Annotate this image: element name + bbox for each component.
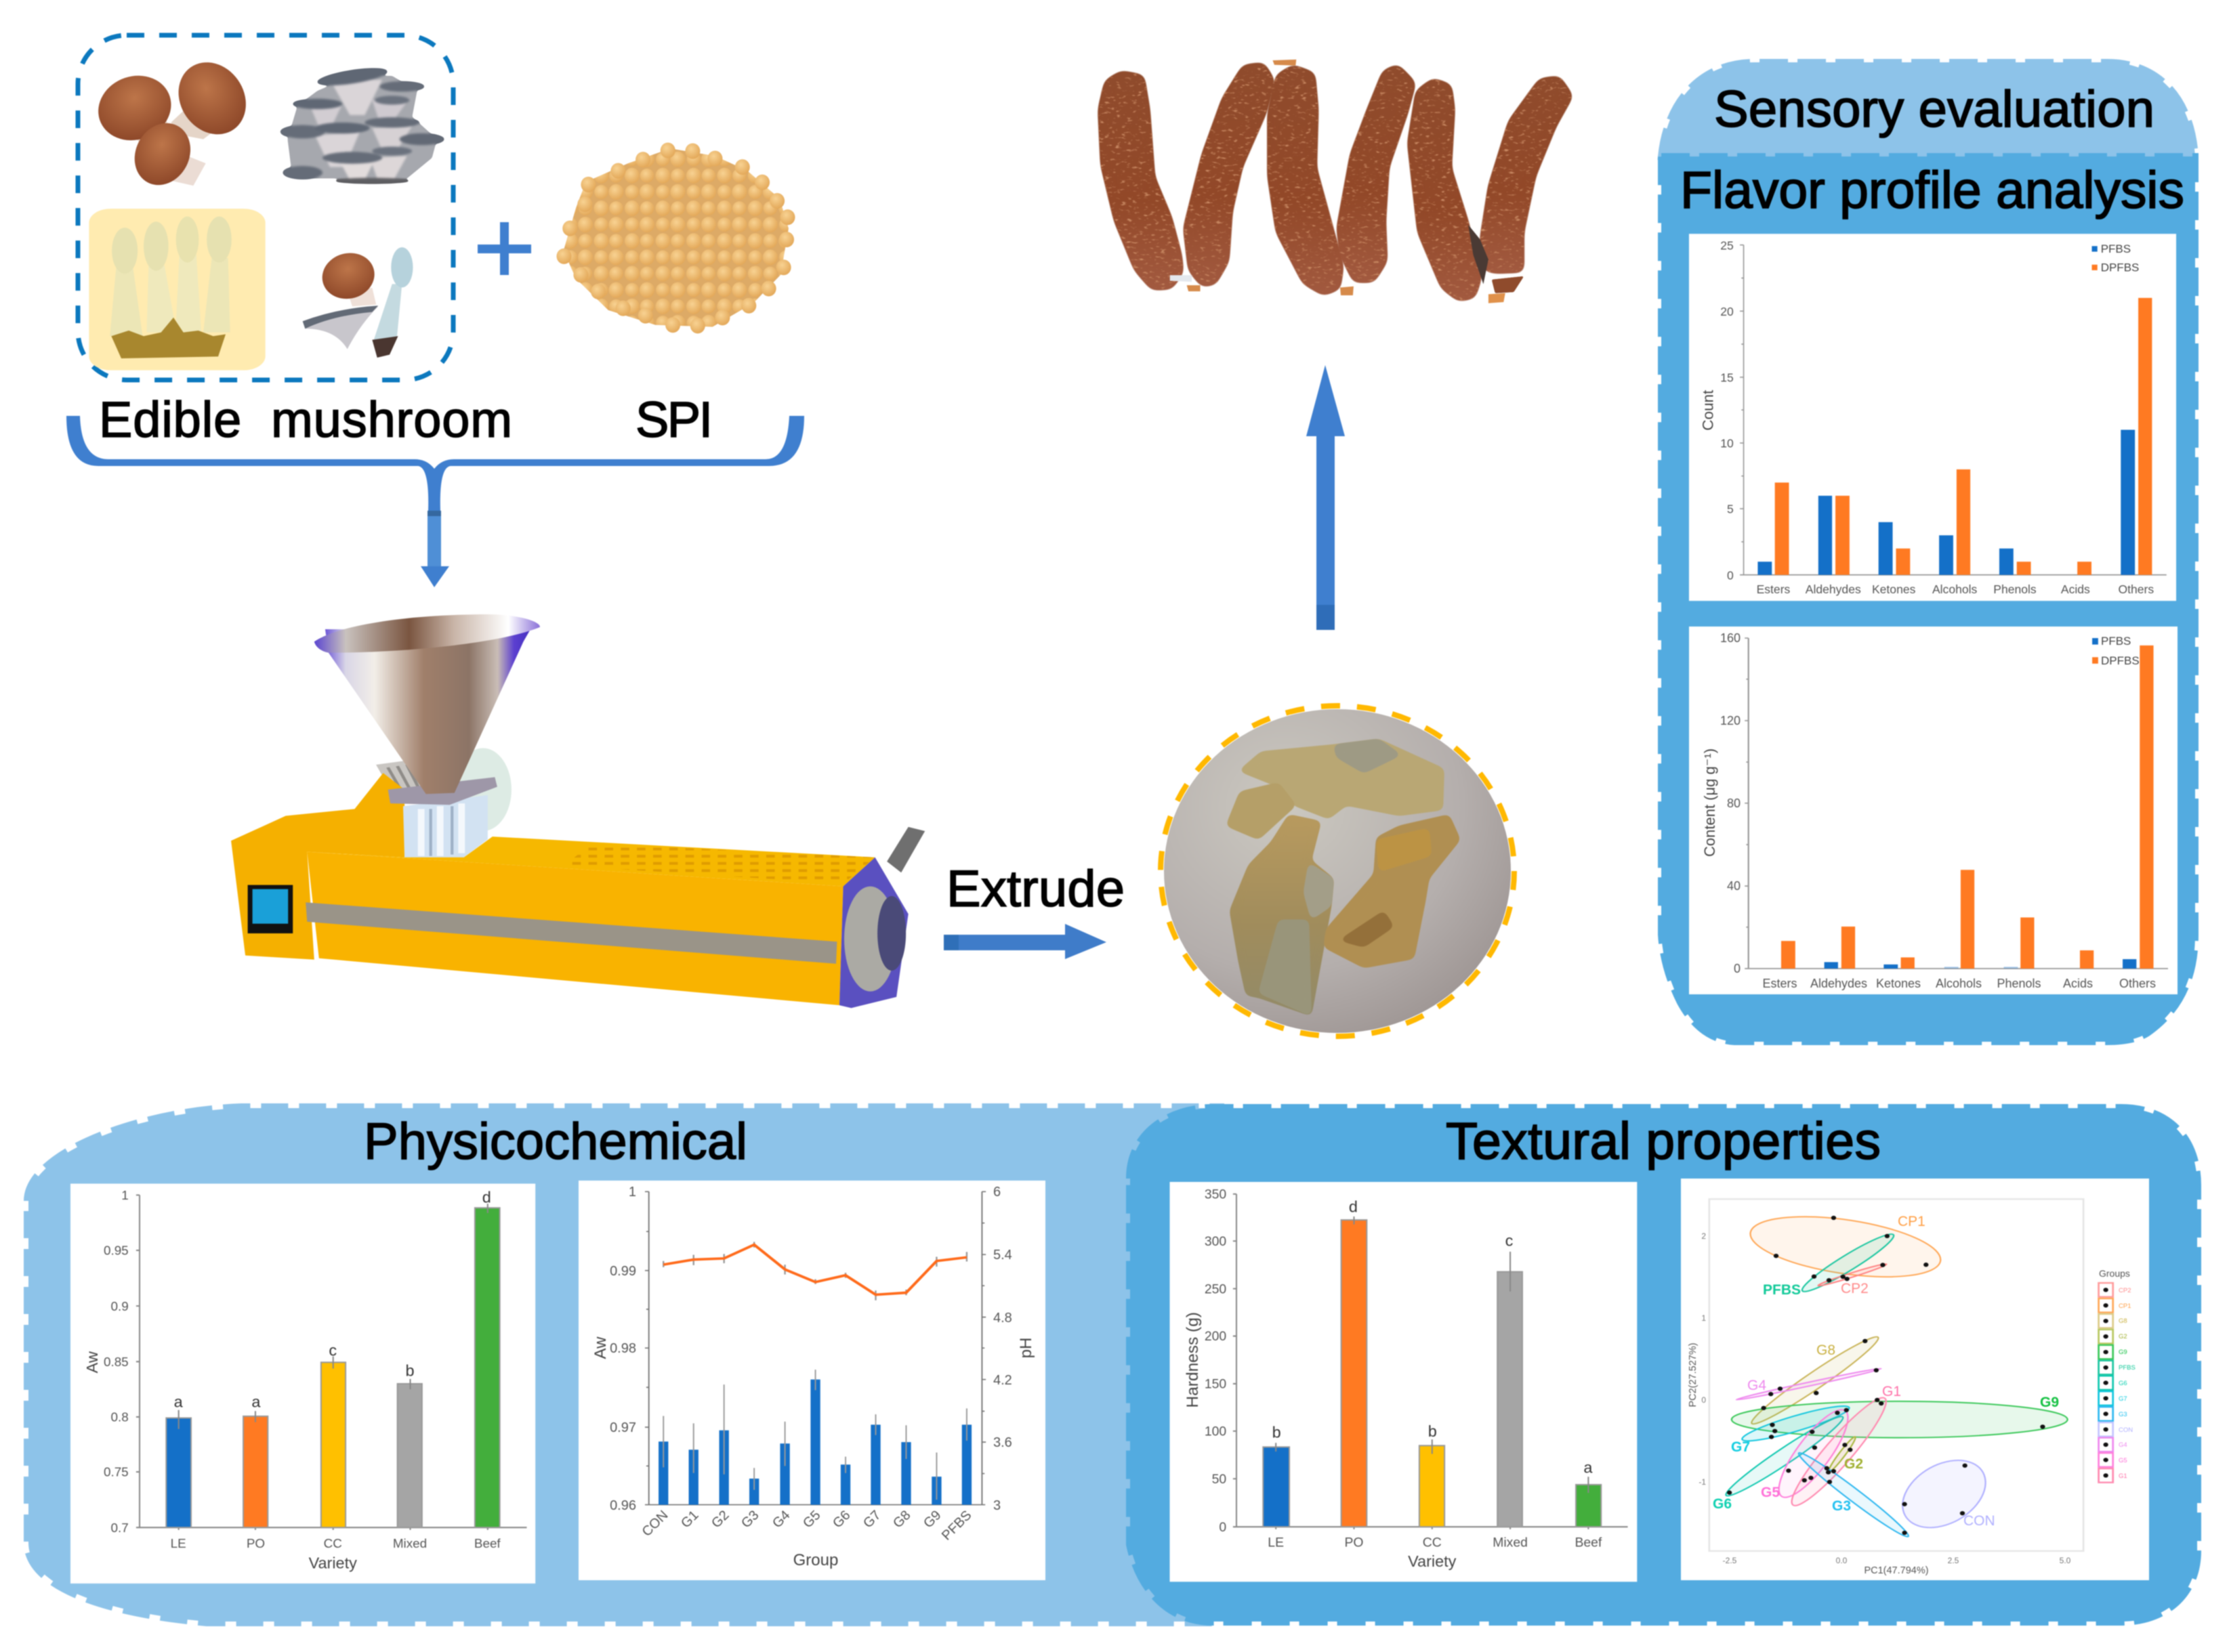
- significance letters: a: [174, 1393, 184, 1411]
- PFBS bars: [1825, 959, 2136, 969]
- axis labels: 0.9: [110, 1299, 129, 1313]
- axis labels: Others: [2118, 583, 2154, 596]
- extruder grey stripe: [306, 902, 837, 964]
- axis ticks: -1: [1699, 1477, 1706, 1487]
- panel: sensory evaluation header: [1661, 62, 2195, 156]
- axis labels: [104, 1188, 501, 1550]
- chart: PCA scatter with ellipses: [1681, 1179, 2149, 1580]
- group labels: CP1: [1898, 1214, 1925, 1229]
- axis labels: G2: [709, 1508, 732, 1531]
- significance letters: [1272, 1198, 1593, 1477]
- significance letters: d: [482, 1189, 491, 1206]
- chart: count of volatile compounds: [1689, 234, 2176, 601]
- x axis title: Group: [793, 1551, 838, 1569]
- icon: soy protein beans: [551, 140, 799, 336]
- extruder vent holes: [564, 843, 875, 884]
- axis labels: Acids: [2063, 977, 2093, 990]
- extruder front face: [307, 852, 843, 1005]
- extruder hopper cone: [325, 629, 530, 794]
- group labels: G6: [1713, 1496, 1732, 1512]
- bars: [1263, 1220, 1601, 1527]
- legend: [2092, 242, 2139, 274]
- significance letters: d: [1349, 1198, 1358, 1215]
- axis labels: G1: [678, 1508, 702, 1531]
- axis labels: 120: [1720, 714, 1741, 727]
- axis labels: 5.4: [993, 1248, 1012, 1263]
- axis labels: 100: [1205, 1424, 1226, 1439]
- legend labels: G2: [2119, 1333, 2127, 1340]
- axis labels: LE: [1268, 1535, 1284, 1550]
- error bars: [1276, 1216, 1588, 1493]
- axis labels: Acids: [2061, 583, 2090, 596]
- group labels: CON: [1963, 1513, 1995, 1529]
- axis labels: 200: [1205, 1329, 1226, 1344]
- axis labels: 250: [1205, 1282, 1226, 1296]
- x axis title: Variety: [1408, 1552, 1457, 1570]
- x axis title: Variety: [309, 1554, 357, 1571]
- axis labels: Phenols: [1993, 583, 2037, 596]
- extruder logo badge: [248, 885, 293, 933]
- Aw bars: [659, 1380, 972, 1505]
- axis labels: 40: [1727, 879, 1741, 893]
- legend labels: G5: [2119, 1457, 2127, 1464]
- label: edible mushroom: Edible mushroom: [99, 391, 512, 448]
- icon: extruder machine: [231, 614, 925, 1008]
- significance letters: c: [329, 1342, 337, 1359]
- axis labels: G9: [921, 1508, 944, 1531]
- photo: extrudate in dashed circle: [1161, 706, 1514, 1036]
- icon: edible mushrooms: [89, 58, 444, 370]
- icon: stalked mushrooms on yellow tile: [89, 209, 266, 370]
- extruder drive housing: [231, 773, 404, 960]
- axis labels: 0.75: [104, 1465, 129, 1479]
- axis labels: 5: [1727, 503, 1734, 516]
- group labels: G1: [1882, 1384, 1901, 1399]
- group labels: G9: [2040, 1395, 2059, 1410]
- axis labels: 150: [1205, 1377, 1226, 1392]
- axis labels: PO: [1344, 1535, 1363, 1550]
- axis labels: 3: [993, 1498, 1001, 1513]
- pH error bars: [663, 1242, 967, 1300]
- chart: content of volatile compounds: [1689, 627, 2178, 994]
- axis ticks: [1699, 1231, 2071, 1565]
- group labels: G3: [1832, 1498, 1851, 1514]
- legend: [2101, 635, 2140, 667]
- y axis title: PC2(27.527%): [1688, 1342, 1699, 1407]
- axis labels: Beef: [474, 1536, 501, 1550]
- axis labels: G7: [860, 1508, 884, 1531]
- axis ticks: 5.0: [2060, 1556, 2071, 1565]
- axis labels: PFBS: [939, 1508, 975, 1543]
- legend labels: CP2: [2119, 1287, 2131, 1294]
- y axis title: Content (μg g⁻¹): [1701, 748, 1718, 857]
- heading: sensory evaluation: Sensory evaluation: [1714, 81, 2154, 138]
- axis labels: 0.97: [610, 1420, 636, 1435]
- y axis title: Hardness (g): [1184, 1312, 1202, 1407]
- heading: physicochemical: Physicochemical: [364, 1113, 747, 1170]
- legend labels: G9: [2119, 1349, 2127, 1356]
- right axis title: pH: [1017, 1338, 1035, 1358]
- axis labels: Mixed: [1493, 1535, 1528, 1550]
- significance letters: [174, 1189, 491, 1411]
- axis labels: [610, 1185, 1012, 1543]
- group labels: G2: [1844, 1456, 1863, 1472]
- axis labels: 25: [1720, 238, 1734, 252]
- axis labels: 0: [1219, 1520, 1226, 1535]
- arrow: extrudate to sausage: [1306, 365, 1345, 630]
- left axis title: Aw: [591, 1336, 610, 1359]
- axis labels: Others: [2119, 977, 2156, 990]
- axis labels: G4: [770, 1508, 793, 1531]
- axis labels: G8: [890, 1508, 914, 1531]
- extruder hopper base: [388, 777, 497, 805]
- extruder hopper mouth: [314, 614, 540, 653]
- legend labels: [2119, 1287, 2136, 1480]
- axis labels: 0.8: [110, 1410, 129, 1424]
- axis labels: Alcohols: [1936, 977, 1982, 990]
- legend: DPFBS: [2101, 654, 2140, 667]
- axis labels: CC: [1423, 1535, 1442, 1550]
- y axis title: Aw: [83, 1351, 101, 1373]
- axis labels: CC: [324, 1536, 342, 1550]
- pH line: [663, 1245, 967, 1294]
- axis labels: 20: [1720, 305, 1734, 318]
- axis labels: Alcohols: [1932, 583, 1978, 596]
- axis labels: Aldehydes: [1806, 583, 1861, 596]
- axis labels: 160: [1720, 631, 1741, 645]
- PFBS bars: [1757, 430, 2135, 575]
- group labels: CP2: [1841, 1281, 1869, 1296]
- axis labels: Mixed: [393, 1536, 427, 1550]
- axis labels: 0.99: [610, 1264, 636, 1279]
- axis labels: G5: [800, 1508, 824, 1531]
- axis labels: 0.85: [104, 1355, 129, 1369]
- legend labels: G1: [2119, 1473, 2127, 1480]
- axis labels: 0.96: [610, 1498, 636, 1513]
- icon: oyster mushrooms: [280, 65, 444, 184]
- panel: physicochemical background: [28, 1108, 1220, 1622]
- axis labels: G6: [830, 1508, 854, 1531]
- extruder back parts: [455, 748, 512, 831]
- legend keys: [2099, 1283, 2113, 1483]
- extruder top face: [307, 836, 875, 887]
- chart: Aw by variety: [70, 1184, 535, 1584]
- significance letters: b: [1428, 1422, 1437, 1440]
- group labels: [1713, 1214, 2059, 1529]
- axis labels: [1720, 238, 2154, 596]
- y axis title: Count: [1700, 389, 1717, 431]
- DPFBS bars: [1775, 298, 2152, 575]
- axis labels: 15: [1720, 371, 1734, 385]
- x axis title: PC1(47.794%): [1864, 1565, 1929, 1576]
- axis labels: 4.8: [993, 1311, 1012, 1326]
- chart: hardness by variety: [1170, 1182, 1637, 1582]
- significance letters: a: [1583, 1459, 1593, 1477]
- group labels: G7: [1731, 1439, 1750, 1455]
- dashed box: edible mushroom group: [78, 35, 453, 380]
- heading: flavor profile analysis: Flavor profile analysis: [1680, 161, 2184, 219]
- axis labels: Ketones: [1872, 583, 1916, 596]
- axis labels: Ketones: [1876, 977, 1921, 990]
- axis labels: 0.7: [110, 1521, 129, 1535]
- legend labels: CP1: [2119, 1302, 2131, 1310]
- legend: PFBS: [2101, 635, 2131, 648]
- extruder heat sink: [376, 759, 426, 790]
- legend labels: G8: [2119, 1317, 2127, 1325]
- axis labels: Beef: [1575, 1535, 1602, 1550]
- panel: textural properties background: [1130, 1108, 2197, 1622]
- legend title: Groups: [2099, 1268, 2130, 1279]
- photo background: [1164, 709, 1511, 1033]
- icon: plus sign: [478, 222, 531, 275]
- axis labels: Esters: [1757, 583, 1791, 596]
- extrudate pieces: [1226, 739, 1460, 1016]
- axis labels: Phenols: [1997, 977, 2041, 990]
- axis labels: 50: [1212, 1472, 1226, 1487]
- axis labels: G3: [738, 1508, 762, 1531]
- axis labels: 80: [1727, 797, 1741, 810]
- axis labels: CON: [640, 1508, 671, 1540]
- group labels: PFBS: [1763, 1282, 1801, 1298]
- icon: chestnut mushrooms: [89, 58, 255, 188]
- axis labels: [1720, 631, 2156, 990]
- axis ticks: 0: [1701, 1395, 1706, 1405]
- chart: Aw and pH by group: [579, 1181, 1045, 1580]
- bracket with arrow into extruder: [66, 416, 804, 587]
- axis labels: LE: [171, 1536, 186, 1550]
- axis labels: 0.95: [104, 1244, 129, 1258]
- legend labels: G4: [2119, 1441, 2127, 1449]
- group ellipses: [1721, 1206, 2068, 1542]
- axis labels: [1205, 1187, 1602, 1550]
- legend labels: G3: [2119, 1411, 2127, 1418]
- axis labels: 0: [1734, 962, 1741, 975]
- label: extrude: Extrude: [946, 860, 1125, 918]
- axis labels: Aldehydes: [1810, 977, 1867, 990]
- axis labels: 300: [1205, 1234, 1226, 1249]
- axis labels: 6: [993, 1185, 1001, 1200]
- axis labels: 4.2: [993, 1373, 1012, 1388]
- axis ticks: 0.0: [1836, 1556, 1848, 1565]
- Aw error bars: [663, 1370, 967, 1500]
- axis labels: 350: [1205, 1187, 1226, 1202]
- group labels: G4: [1747, 1378, 1766, 1393]
- significance letters: b: [405, 1362, 415, 1380]
- panel: flavor profile analysis: [1661, 156, 2195, 1042]
- group labels: G5: [1761, 1485, 1780, 1500]
- bars: [166, 1208, 500, 1527]
- photo: plant-based sausages: [1098, 60, 1574, 303]
- error bars: [179, 1204, 488, 1429]
- legend labels: PFBS: [2119, 1364, 2136, 1372]
- significance letters: a: [251, 1393, 261, 1411]
- extruder feed throat: [403, 795, 488, 857]
- axis labels: PO: [247, 1536, 265, 1550]
- significance letters: b: [1272, 1424, 1281, 1441]
- axis labels: Esters: [1762, 977, 1797, 990]
- legend labels: G6: [2119, 1380, 2127, 1387]
- legend labels: G7: [2119, 1395, 2127, 1403]
- axis ticks: 2.5: [1948, 1556, 1959, 1565]
- DPFBS bars: [1781, 645, 2154, 969]
- legend labels: CON: [2119, 1426, 2133, 1434]
- axis labels: 0.98: [610, 1341, 636, 1356]
- axis labels: 1: [121, 1188, 129, 1202]
- data points: [1727, 1216, 2045, 1535]
- significance letters: c: [1505, 1231, 1514, 1249]
- axis labels: 3.6: [993, 1435, 1012, 1450]
- legend: DPFBS: [2101, 261, 2139, 274]
- axis ticks: -2.5: [1723, 1556, 1737, 1565]
- edge beans: [556, 142, 795, 333]
- icon: three mushroom varieties: [303, 247, 413, 358]
- arrow: extrude: [944, 924, 1106, 959]
- axis ticks: 2: [1701, 1231, 1706, 1241]
- axis labels: 1: [629, 1185, 636, 1200]
- group labels: G8: [1816, 1342, 1835, 1358]
- axis ticks: 1: [1701, 1313, 1706, 1323]
- extruder end plate: [839, 827, 925, 1008]
- legend: PFBS: [2101, 242, 2131, 255]
- dashed ring: [1161, 706, 1514, 1036]
- label: SPI: SPI: [636, 391, 713, 448]
- axis labels: 10: [1720, 437, 1734, 450]
- heading: textural properties: Textural properties: [1446, 1112, 1881, 1170]
- axis labels: 0: [1727, 568, 1734, 582]
